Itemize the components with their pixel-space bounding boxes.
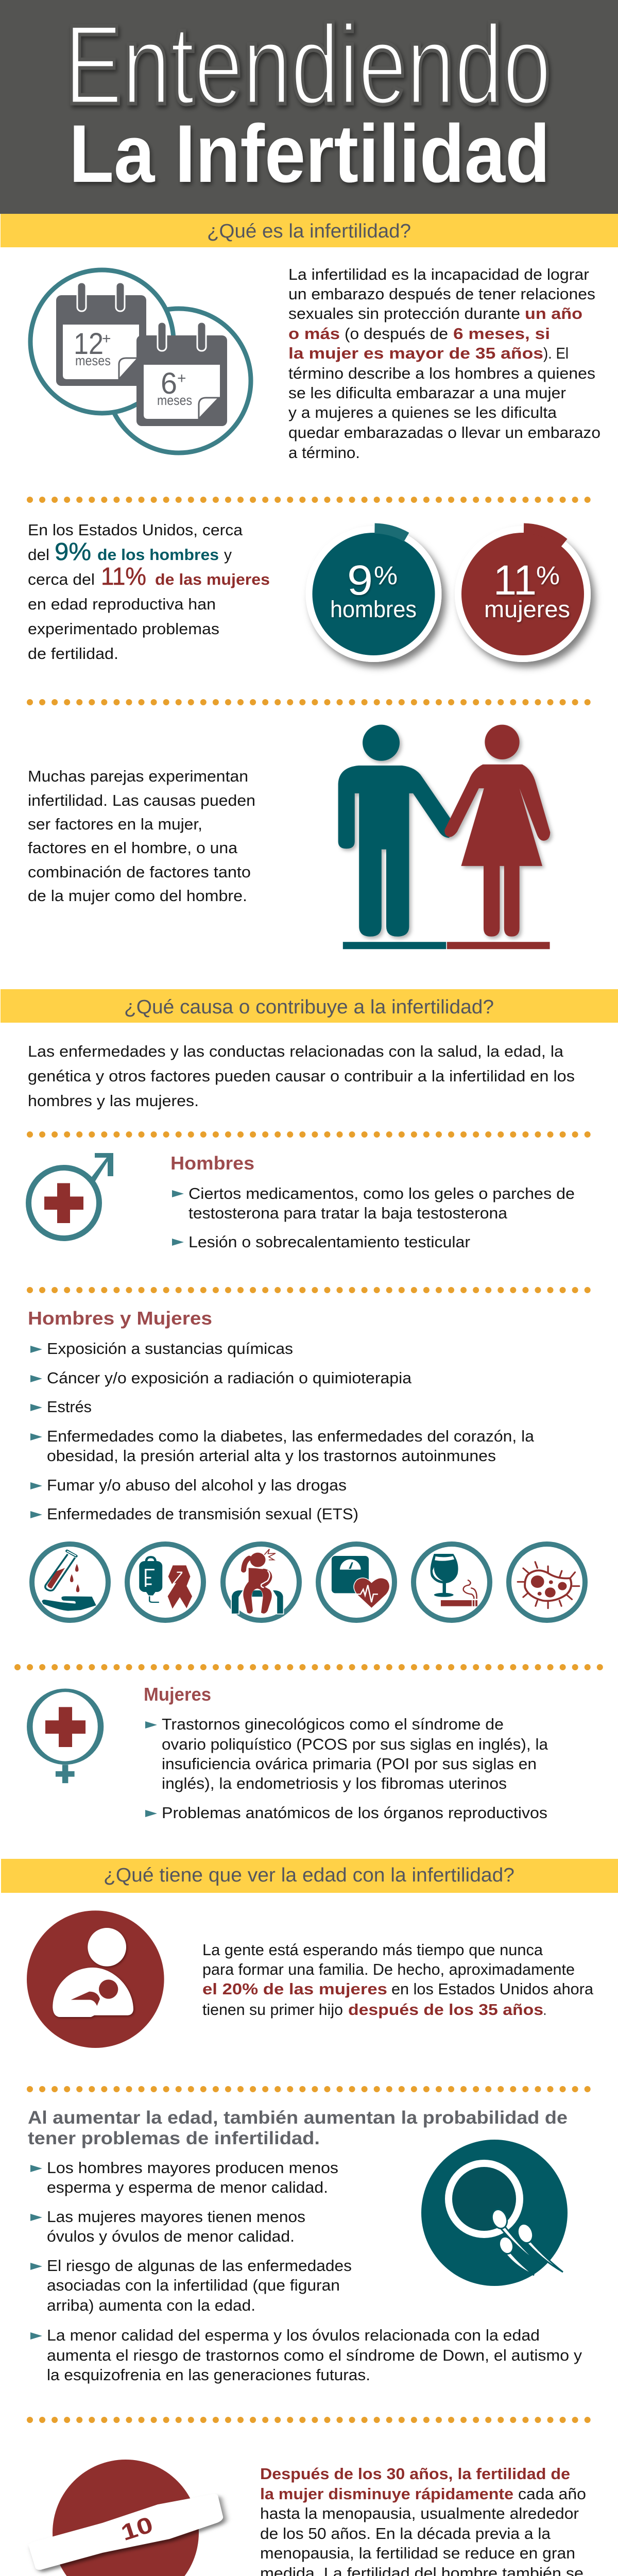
text block: prevalence: experimentado problemas (28, 620, 219, 638)
section heading: ¿Qué es la infertilidad?: ¿Qué es la infertilidad? (207, 221, 411, 242)
icon: chemicals test tube and hand (32, 1544, 108, 1620)
heading: age and infertility probability: Al aumentar la edad, también aumentan la probabilidad de (28, 2108, 568, 2128)
text block: waiting longer: . (543, 2001, 546, 2019)
bullet list: women (145, 1715, 548, 1822)
text block: definition of infertility: sexuales sin protección durante (288, 304, 520, 323)
section heading: ¿Qué causa o contribuye a la infertilidad?: ¿Qué causa o contribuye a la infertilidad? (124, 996, 494, 1018)
text block: couples: factores en el hombre, o una (28, 839, 238, 857)
text block: couples: ser factores en la mujer, (28, 815, 202, 833)
text block: after 30 fertility (260, 2465, 588, 2576)
bullet list: men and women: Estrés (47, 1398, 92, 1416)
text block: definition of infertility: un año (525, 304, 582, 323)
bullet list: age effects: Las mujeres mayores tienen menos (47, 2208, 305, 2226)
text block: prevalence: de las mujeres (155, 570, 270, 588)
text block: prevalence (28, 521, 270, 663)
text block: couples: infertilidad. Las causas pueden (28, 791, 255, 809)
bullet list: men and women (30, 1340, 535, 1523)
text block: couples: Muchas parejas experimentan (28, 767, 248, 785)
text block: couples: combinación de factores tanto (28, 863, 251, 881)
panel: women causes (144, 1684, 548, 1822)
section heading: ¿Qué es la infertilidad? (1, 214, 618, 247)
title line: La Infertilidad: La Infertilidad (69, 108, 550, 199)
bullet list: women: inglés), la endometriosis y los fibromas uterinos (162, 1774, 507, 1792)
bullet list: age effects: óvulos y óvulos de menor calidad. (47, 2227, 295, 2245)
bullet list: age effects: esperma y esperma de menor calidad. (47, 2178, 328, 2196)
calendar 6+: 6 (161, 367, 177, 400)
text block: definition of infertility: quedar embarazadas o llevar un embarazo (288, 423, 600, 442)
text block: waiting longer: tienen su primer hijo (202, 2001, 343, 2019)
bullet list: age effects: Los hombres mayores producen menos (47, 2159, 338, 2177)
panel: men causes (170, 1153, 575, 1251)
text block: definition of infertility: se les dificulta embarazar a una mujer (288, 384, 566, 402)
section heading: ¿Qué tiene que ver la edad con la infertilidad? (1, 1859, 618, 1893)
text block: definition of infertility: y a mujeres a quienes se les dificulta (288, 403, 557, 421)
chart: 11% of women: 11 (493, 557, 537, 604)
bullet list: women: insuficiencia ovárica primaria (POI por sus siglas en (162, 1755, 537, 1773)
icon: egg and sperm (421, 2140, 568, 2286)
text block: causes intro: hombres y las mujeres. (28, 1092, 199, 1110)
chart: 11% of women (455, 526, 591, 662)
bullet list: men and women: obesidad, la presión arterial alta y los trastornos autoinmunes (47, 1447, 496, 1465)
bullet list: men (172, 1184, 575, 1251)
icon: IV bag and ribbon (127, 1544, 203, 1620)
text block: definition of infertility: la mujer es mayor de 35 años (288, 344, 543, 362)
heading: Hombres: Hombres (170, 1153, 254, 1174)
text block: waiting longer (202, 1941, 594, 2019)
calendar 12+: meses (75, 353, 111, 368)
bullet list: men and women: Cáncer y/o exposición a radiación o quimioterapia (47, 1369, 412, 1387)
bullet list: men: Ciertos medicamentos, como los geles o parches de (188, 1184, 575, 1202)
heading: Mujeres: Mujeres (144, 1684, 211, 1705)
calendar 12+ (56, 282, 146, 386)
text block: prevalence: de fertilidad. (28, 645, 118, 663)
text block: definition of infertility (288, 265, 600, 462)
bullet list: age effects: La menor calidad del esperma y los óvulos relacionada con la edad (47, 2326, 540, 2344)
bullet list: age effects: la esquizofrenia en las generaciones futuras. (47, 2366, 370, 2384)
text block: after 30 fertility: la mujer disminuye rápidamente (260, 2485, 513, 2503)
chart: 11% of women: mujeres (484, 596, 570, 622)
calendar 6+: meses (157, 393, 192, 408)
bullet list: men and women: Enfermedades como la diabetes, las enfermedades del corazón, la (47, 1427, 535, 1445)
icon: 10 years band (28, 2460, 223, 2576)
bullet list: age effects: El riesgo de algunas de las enfermedades (47, 2257, 352, 2275)
text block: prevalence: En los Estados Unidos, cerca (28, 521, 243, 539)
bullet list: age effects (30, 2159, 582, 2384)
text block: prevalence: 9% (55, 538, 91, 566)
text block: after 30 fertility: hasta la menopausia, usualmente alrededor (260, 2504, 579, 2522)
section heading: ¿Qué tiene que ver la edad con la infertilidad?: ¿Qué tiene que ver la edad con la infertilidad? (104, 1865, 514, 1886)
text block: prevalence: en edad reproductiva han (28, 595, 216, 613)
text block: after 30 fertility: de los 50 años. En la década previa a la (260, 2524, 551, 2543)
text block: couples (28, 767, 255, 905)
bullet list: age effects: asociadas con la infertilidad (que figuran (47, 2276, 340, 2294)
icon: female symbol with medical cross (30, 1690, 101, 1783)
heading: age and infertility probability (28, 2108, 568, 2148)
text block: waiting longer: el 20% de las mujeres (202, 1980, 387, 1998)
bullet list: women: ovario poliquístico (PCOS por sus siglas en inglés), la (162, 1735, 548, 1753)
icon: bacterium (509, 1544, 585, 1620)
text block: causes intro (28, 1042, 575, 1110)
bullet list: men: testosterona para tratar la baja testosterona (188, 1204, 508, 1222)
man figure (338, 725, 451, 937)
icon: wine glass and cigarette (414, 1544, 490, 1620)
text block: definition of infertility: ). El (543, 344, 569, 362)
chart: 9% of men (306, 526, 442, 662)
text block: prevalence: 11% (101, 563, 146, 590)
bullet list: age effects: arriba) aumenta con la edad. (47, 2296, 255, 2314)
chart: 9% of men: 9 (347, 557, 373, 604)
text block: prevalence: y (224, 546, 232, 564)
icon: calendars 12+ and 6+ months (30, 270, 251, 453)
chart: 9% of men: % (374, 561, 398, 590)
text block: prevalence: del (28, 546, 49, 564)
calendar 6+ (136, 322, 227, 426)
text block: definition of infertility: a término. (288, 444, 360, 462)
icon: stress person (223, 1544, 299, 1620)
text block: definition of infertility: La infertilidad es la incapacidad de lograr (288, 265, 589, 283)
text block: definition of infertility: (o después de (345, 325, 448, 343)
text block: waiting longer: después de los 35 años (348, 2001, 543, 2019)
bullet list: age effects: aumenta el riesgo de trastornos como el síndrome de Down, el autismo y (47, 2346, 582, 2364)
calendar 12+: + (102, 330, 111, 347)
chart: 9% of men: hombres (330, 596, 417, 622)
section heading: ¿Qué causa o contribuye a la infertilidad? (1, 989, 618, 1023)
text block: definition of infertility: un embarazo después de tener relaciones (288, 285, 595, 303)
panel: men and women causes (28, 1308, 535, 1523)
text block: waiting longer: para formar una familia. De hecho, aproximadamente (202, 1960, 575, 1978)
icon: scale and heart (318, 1544, 394, 1620)
bullet list: women: Trastornos ginecológicos como el síndrome de (162, 1715, 504, 1733)
icon: man and woman holding hands (338, 725, 550, 949)
text block: causes intro: Las enfermedades y las conductas relacionadas con la salud, la edad, la (28, 1042, 564, 1060)
calendar 6+: + (177, 370, 186, 387)
bullet list: men and women: Exposición a sustancias químicas (47, 1340, 293, 1358)
text block: waiting longer: La gente está esperando más tiempo que nunca (202, 1941, 543, 1959)
text block: after 30 fertility: menopausia, la fertilidad se reduce en gran (260, 2544, 575, 2562)
heading: age and infertility probability: tener problemas de infertilidad. (28, 2128, 320, 2148)
text block: waiting longer: en los Estados Unidos ahora (391, 1980, 594, 1998)
text block: definition of infertility: o más (288, 325, 340, 343)
bullet list: men: Lesión o sobrecalentamiento testicular (188, 1233, 470, 1251)
text block: prevalence: cerca del (28, 570, 95, 588)
text block: definition of infertility: término describe a los hombres a quienes (288, 364, 595, 382)
text block: couples: de la mujer como del hombre. (28, 887, 247, 905)
header: title (0, 0, 618, 214)
text block: after 30 fertility: Después de los 30 años, la fertilidad de (260, 2465, 570, 2483)
woman figure (444, 725, 550, 937)
bullet list: men and women: Fumar y/o abuso del alcohol y las drogas (47, 1476, 347, 1494)
text block: prevalence: de los hombres (97, 546, 219, 564)
calendar 12+: 12 (74, 327, 104, 361)
icon: mother and baby (27, 1910, 164, 2048)
chart: 11% of women: % (536, 561, 560, 590)
text block: causes intro: genética y otros factores pueden causar o contribuir a la infertilidad en los (28, 1067, 575, 1085)
icon: 10 years band: 10 (118, 2512, 156, 2546)
heading: Hombres y Mujeres: Hombres y Mujeres (28, 1308, 212, 1329)
icon: male symbol with medical cross (29, 1153, 113, 1239)
text block: definition of infertility: 6 meses, si (453, 325, 550, 343)
text block: after 30 fertility: cada año (518, 2485, 586, 2503)
bullet list: men and women: Enfermedades de transmisión sexual (ETS) (47, 1505, 358, 1523)
bullet list: women: Problemas anatómicos de los órganos reproductivos (162, 1804, 547, 1822)
